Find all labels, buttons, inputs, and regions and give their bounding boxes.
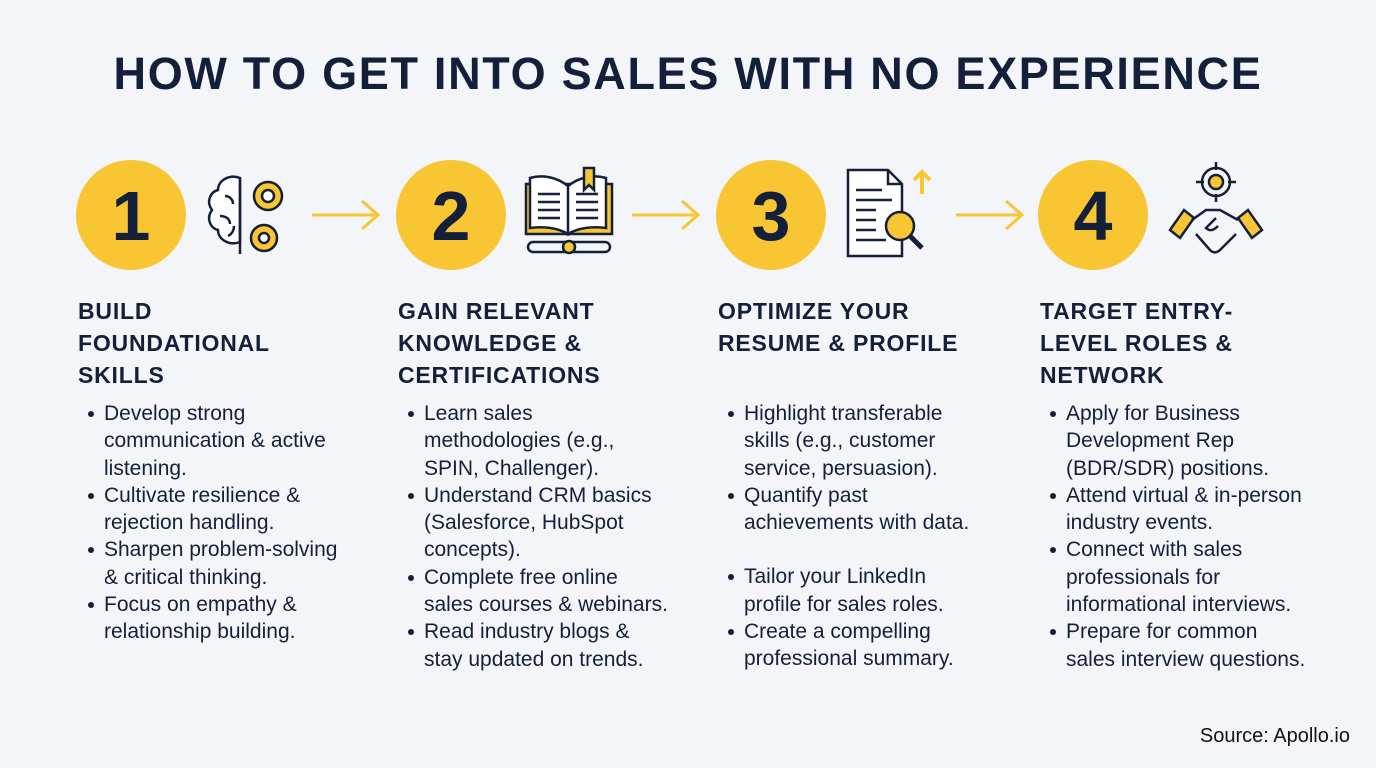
heading 4: NETWORK <box>1040 362 1164 388</box>
bullets 3: Quantify past achievements with data. <box>744 484 969 534</box>
arrow 2 <box>632 200 700 230</box>
heading 4: LEVEL ROLES & <box>1040 330 1233 356</box>
bullets 2: Understand CRM basics (Salesforce, HubSpot concepts). <box>424 484 652 561</box>
bullets 1: Sharpen problem-solving & critical thinking. <box>104 538 337 589</box>
bullets 2 <box>408 402 668 671</box>
column 2 text <box>398 298 668 671</box>
bullets 2: Read industry blogs & stay updated on trends. <box>424 620 644 671</box>
heading 1: FOUNDATIONAL <box>78 330 270 356</box>
step 3 <box>716 160 932 270</box>
heading 2 <box>398 298 600 388</box>
column 1 text <box>78 298 337 643</box>
bullets 3 <box>728 402 969 670</box>
icon: resume with magnifier <box>846 168 932 258</box>
heading 2: KNOWLEDGE & <box>398 330 582 356</box>
title: HOW TO GET INTO SALES WITH NO EXPERIENCE <box>114 48 1262 99</box>
step 4 <box>1038 160 1264 270</box>
number circle 3: 3 <box>752 177 790 255</box>
icon: book with diploma <box>524 166 614 254</box>
bullets 3: Tailor your LinkedIn profile for sales roles. <box>744 565 944 616</box>
icon: brain and gears <box>208 175 284 254</box>
heading 2: GAIN RELEVANT <box>398 298 595 324</box>
source note: Source: Apollo.io <box>1200 725 1350 747</box>
bullets 4 <box>1050 402 1305 671</box>
icon: target and handshake <box>1168 162 1264 254</box>
number circle 1: 1 <box>112 177 150 255</box>
arrow 3 <box>956 200 1024 230</box>
bullets 4: Attend virtual & in-person industry events. <box>1066 484 1302 534</box>
heading 2: CERTIFICATIONS <box>398 362 600 388</box>
number circle 2 <box>396 160 506 270</box>
heading 4 <box>1040 298 1233 388</box>
bullets 4: Prepare for common sales interview questions. <box>1066 620 1305 671</box>
column 3 text <box>718 298 969 670</box>
heading 4: TARGET ENTRY- <box>1040 298 1233 324</box>
bullets 4: Connect with sales professionals for informational interviews. <box>1066 538 1291 616</box>
bullets 1 <box>88 402 337 643</box>
heading 3: OPTIMIZE YOUR <box>718 298 909 324</box>
bullets 1: Focus on empathy & relationship building. <box>104 593 297 643</box>
heading 1 <box>78 298 270 388</box>
heading 3 <box>718 298 958 356</box>
bullets 1: Cultivate resilience & rejection handling. <box>104 484 300 534</box>
step 2 <box>396 160 614 270</box>
step 1 <box>76 160 284 270</box>
bullets 3: Create a compelling professional summary. <box>744 620 954 670</box>
number circle 2: 2 <box>432 177 470 255</box>
heading 1: BUILD <box>78 298 152 324</box>
number circle 1 <box>76 160 186 270</box>
bullets 1: Develop strong communication & active listening. <box>104 402 326 480</box>
bullets 4: Apply for Business Development Rep (BDR/SDR) positions. <box>1066 402 1269 480</box>
column 4 text <box>1040 298 1305 671</box>
heading 1: SKILLS <box>78 362 165 388</box>
number circle 4 <box>1038 160 1148 270</box>
bullets 3: Highlight transferable skills (e.g., customer service, persuasion). <box>744 402 942 480</box>
number circle 3 <box>716 160 826 270</box>
number circle 4: 4 <box>1074 177 1112 255</box>
arrow 1 <box>312 200 380 230</box>
heading 3: RESUME & PROFILE <box>718 330 958 356</box>
bullets 2: Learn sales methodologies (e.g., SPIN, Challenger). <box>424 402 614 480</box>
bullets 2: Complete free online sales courses & webinars. <box>424 566 668 616</box>
